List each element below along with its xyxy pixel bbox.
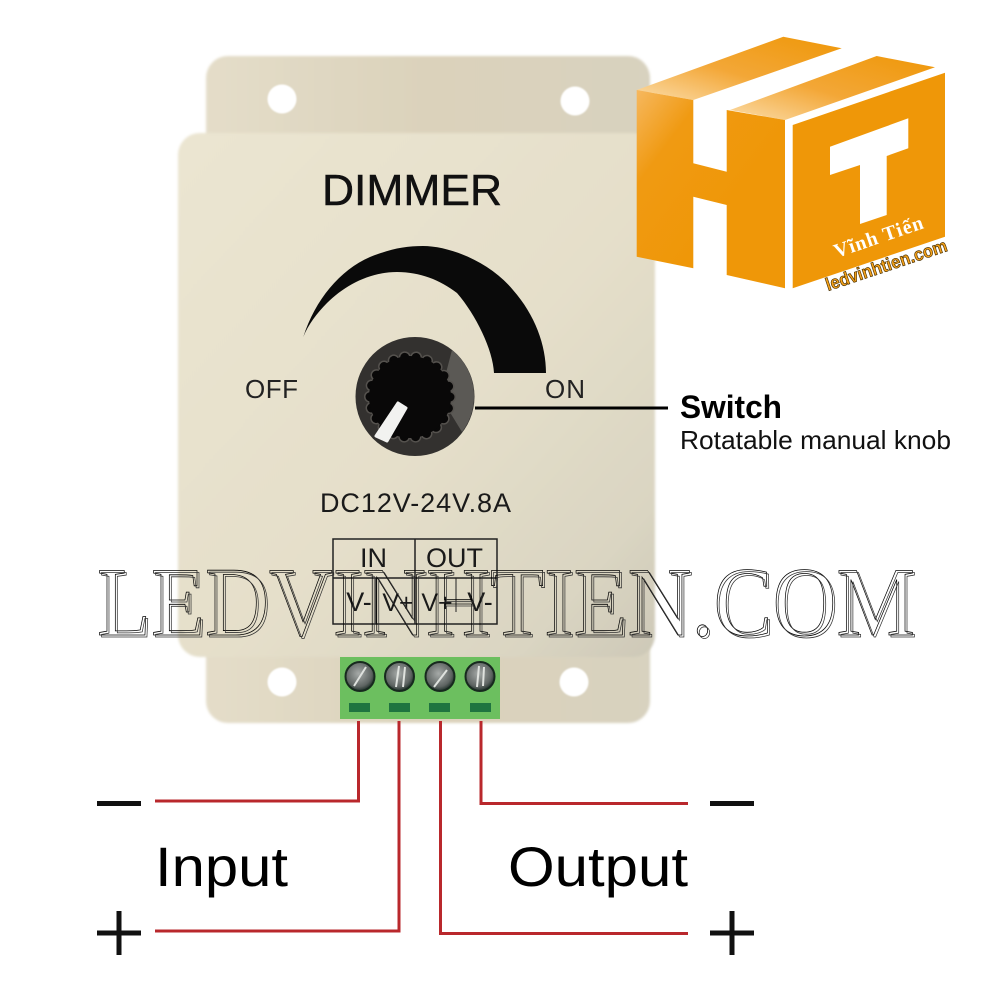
label: Input: Input [155,835,288,898]
heading: DIMMER: DIMMER [322,167,502,215]
logo: letter H face [637,90,785,288]
dimmer device [178,56,655,723]
callout: switch description: Rotatable manual knob [680,425,951,455]
icon: output minus [710,801,754,806]
watermark: LEDVINHTIEN.COM: LEDVINHTIEN.COM [99,550,917,659]
icon: rotary knob [356,337,474,456]
back mounting plate [206,56,650,723]
icon: input minus [97,801,141,806]
terminal wiring table: V- [346,587,372,617]
label: ON: ON [545,374,585,404]
label: OFF: OFF [245,374,298,404]
brightness arc [303,246,546,373]
front panel [178,133,655,657]
logo: website text: ledvinhtien.com [823,236,950,295]
logo: letter T face [793,73,945,288]
terminal wiring table: V+ [382,589,414,617]
terminal wiring table: OUT [426,543,483,573]
icon: output plus [710,911,754,955]
callout: switch leader line [475,406,668,410]
terminal wiring table: V- [467,587,493,617]
logo: Vinh Tien text: Vĩnh Tiến [831,212,926,263]
rating text: DC12V-24V.8A [320,488,511,518]
green screw terminal [340,657,500,719]
watermark: LEDVINHTIEN.COM: LEDVINHTIEN.COM [97,548,915,657]
logo: HT Vinh Tien [637,37,950,295]
callout: switch heading: Switch [680,389,782,425]
logo: H top faces [637,37,935,120]
terminal wiring table: IN [360,543,387,573]
icon: input plus [97,911,141,955]
red wires [155,721,688,934]
terminal wiring table: V+ [421,589,453,617]
mounting holes [268,84,590,696]
terminal wiring table [333,539,497,624]
label: Output: Output [508,835,688,898]
